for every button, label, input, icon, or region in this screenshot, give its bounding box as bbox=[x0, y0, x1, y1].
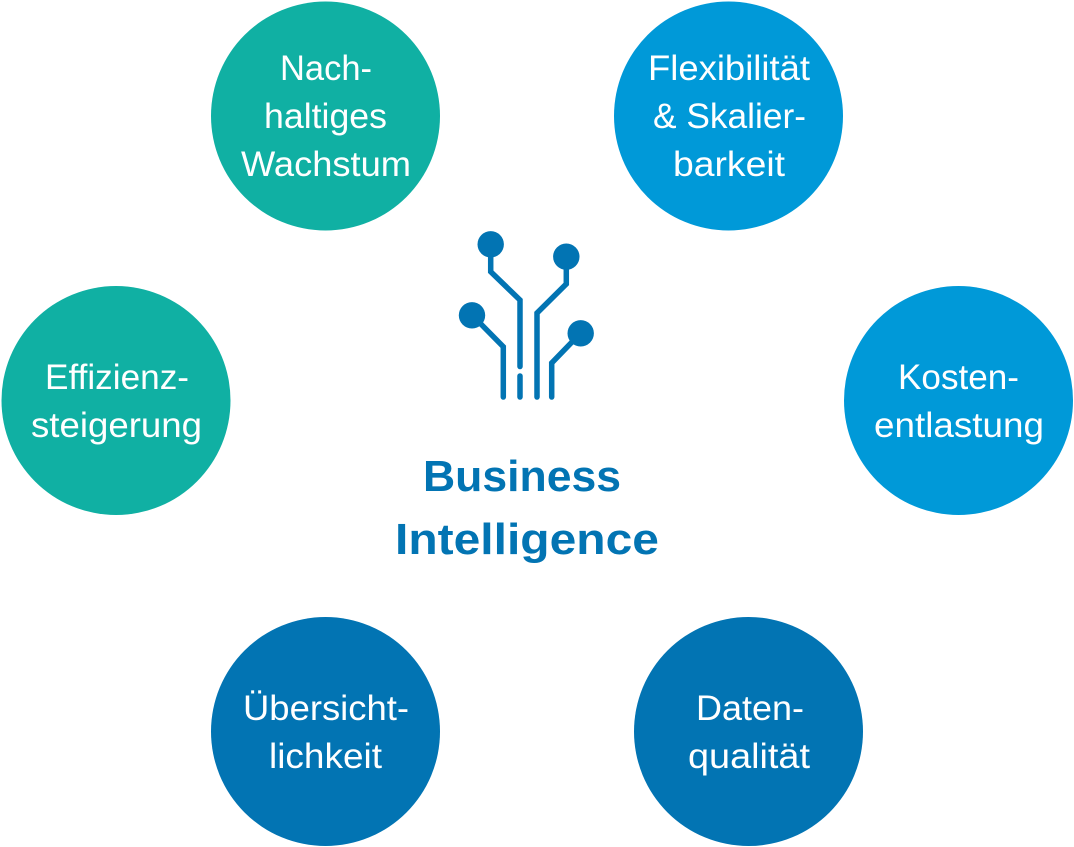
circle: Nachhaltiges Wachstum bbox=[211, 2, 440, 230]
circle: Nachhaltiges Wachstum: Wachstum bbox=[241, 145, 411, 184]
circle: Flexibilität & Skalierbarkeit: barkeit bbox=[673, 145, 785, 184]
circle: Übersichtlichkeit bbox=[211, 617, 440, 846]
circle: Flexibilität & Skalierbarkeit: & Skalier- bbox=[653, 97, 806, 136]
circle: Effizienzsteigerung: Effizienz- bbox=[45, 358, 189, 397]
circle: Effizienzsteigerung: steigerung bbox=[31, 406, 202, 445]
circle: Übersichtlichkeit: Übersicht- bbox=[243, 689, 409, 728]
circle: Nachhaltiges Wachstum: Nach- bbox=[280, 49, 372, 88]
circle: Datenqualität: qualität bbox=[688, 737, 810, 776]
circle: Datenqualität: Daten- bbox=[696, 689, 804, 728]
circle: Kostenentlastung: Kosten- bbox=[898, 358, 1019, 397]
circle: Nachhaltiges Wachstum: haltiges bbox=[264, 97, 387, 136]
icon: circuit tree bbox=[459, 231, 594, 397]
circle: Flexibilität & Skalierbarkeit: Flexibilität bbox=[648, 49, 810, 88]
circle: Kostenentlastung: entlastung bbox=[874, 406, 1044, 445]
title: Intelligence bbox=[395, 515, 659, 564]
circle: Flexibilität & Skalierbarkeit bbox=[614, 2, 843, 230]
title: Business bbox=[423, 452, 621, 501]
title bbox=[395, 452, 659, 564]
circle: Übersichtlichkeit: lichkeit bbox=[269, 737, 382, 776]
circle: Effizienzsteigerung bbox=[2, 286, 230, 515]
circle: Datenqualität bbox=[634, 617, 863, 846]
circle: Kostenentlastung bbox=[844, 286, 1073, 515]
